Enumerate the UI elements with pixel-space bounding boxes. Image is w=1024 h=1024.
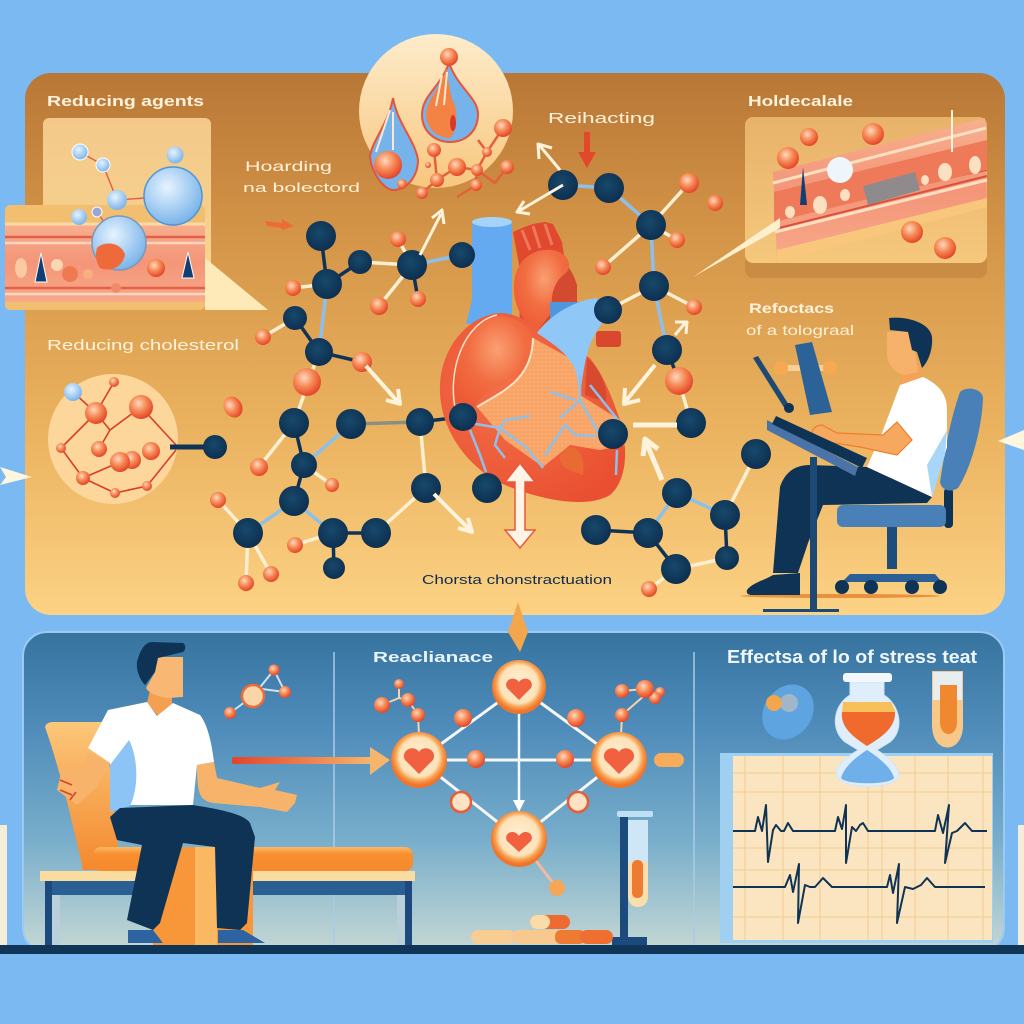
vessels on top <box>513 222 565 270</box>
heart <box>440 217 625 502</box>
small molecule icon <box>224 664 291 719</box>
bench seat <box>93 847 413 871</box>
figure: person at console <box>740 318 983 612</box>
torso <box>867 377 947 497</box>
arrow: refracting red <box>578 132 596 168</box>
test tube on stand <box>612 811 653 945</box>
heading: refracting: Reihacting <box>548 110 655 127</box>
ventricles <box>440 313 625 502</box>
text: tolograal: of a tolograal <box>746 322 854 338</box>
tray <box>767 420 858 476</box>
heading: chart label: Chorsta chonstractuation <box>422 572 612 587</box>
figure: seated patient <box>40 642 415 945</box>
legs <box>110 805 255 930</box>
panel: lower stress test <box>23 632 1004 952</box>
coronary branches <box>470 375 618 475</box>
aorta <box>466 221 512 324</box>
head <box>887 330 918 375</box>
pills <box>471 915 613 944</box>
trace 2 <box>733 864 985 923</box>
text: refoctacs: Refoctacs <box>749 300 834 316</box>
neck <box>147 690 172 716</box>
arrow: red vertical <box>505 463 535 548</box>
trace 1 <box>733 805 987 863</box>
chair back <box>45 722 118 870</box>
inset: artery section <box>693 110 987 278</box>
table <box>40 871 415 881</box>
inset: reducing agents <box>5 118 268 310</box>
artery band <box>5 223 205 302</box>
network: heart nodes <box>374 660 684 896</box>
handheld device <box>795 342 832 415</box>
console stand <box>810 457 817 610</box>
arrow: patient to network <box>232 747 390 775</box>
legs <box>773 465 932 573</box>
heading: holdecalale: Holdecalale <box>748 93 853 110</box>
inset: cholesterol molecule circle <box>48 374 227 504</box>
inset: droplets circle <box>359 34 514 199</box>
left cluster <box>374 679 425 735</box>
ECG chart <box>720 753 993 943</box>
heading: reducing agents: Reducing agents <box>47 93 204 110</box>
heading: rebalance: Reaclianace <box>373 649 493 666</box>
connector marker between panels <box>508 602 528 652</box>
arrow: hoarding red <box>265 219 294 230</box>
icon: small lens <box>752 674 824 750</box>
molecular network: atoms <box>233 170 771 584</box>
heading: effects of stress test: Effectsa of lo of stress teat <box>727 647 977 667</box>
side page tabs <box>0 825 1024 945</box>
dumbbell <box>778 365 832 371</box>
icon: orange test tube <box>932 671 963 748</box>
panel: upper molecular pathway <box>25 73 1005 615</box>
torso <box>88 702 214 812</box>
heading: hoarding label: Hoarding <box>245 158 332 174</box>
molecular network: bonds <box>218 183 756 589</box>
small lesion <box>560 448 584 475</box>
arm right <box>197 762 297 812</box>
pulmonary vessel blue <box>537 298 603 395</box>
baseline bar <box>0 945 1024 954</box>
console screen <box>753 356 789 409</box>
heading: reducing cholesterol: Reducing cholesterol <box>47 337 239 354</box>
arm <box>812 422 912 455</box>
chair <box>944 488 953 528</box>
molecule in circle <box>416 119 514 199</box>
heart node circles <box>391 660 647 867</box>
arrows at page edges <box>0 430 1024 485</box>
neck <box>900 365 922 386</box>
text: cholesterol sublabel: na bolectord <box>243 180 360 195</box>
lower base behind legs <box>153 847 253 945</box>
arrows: pathway <box>366 144 687 532</box>
right cluster <box>615 680 665 735</box>
molecular network: orange atoms <box>210 173 723 597</box>
icon: hourglass flask <box>835 673 899 786</box>
arm left <box>57 752 110 805</box>
floor shadow <box>740 594 940 598</box>
head <box>146 657 183 698</box>
